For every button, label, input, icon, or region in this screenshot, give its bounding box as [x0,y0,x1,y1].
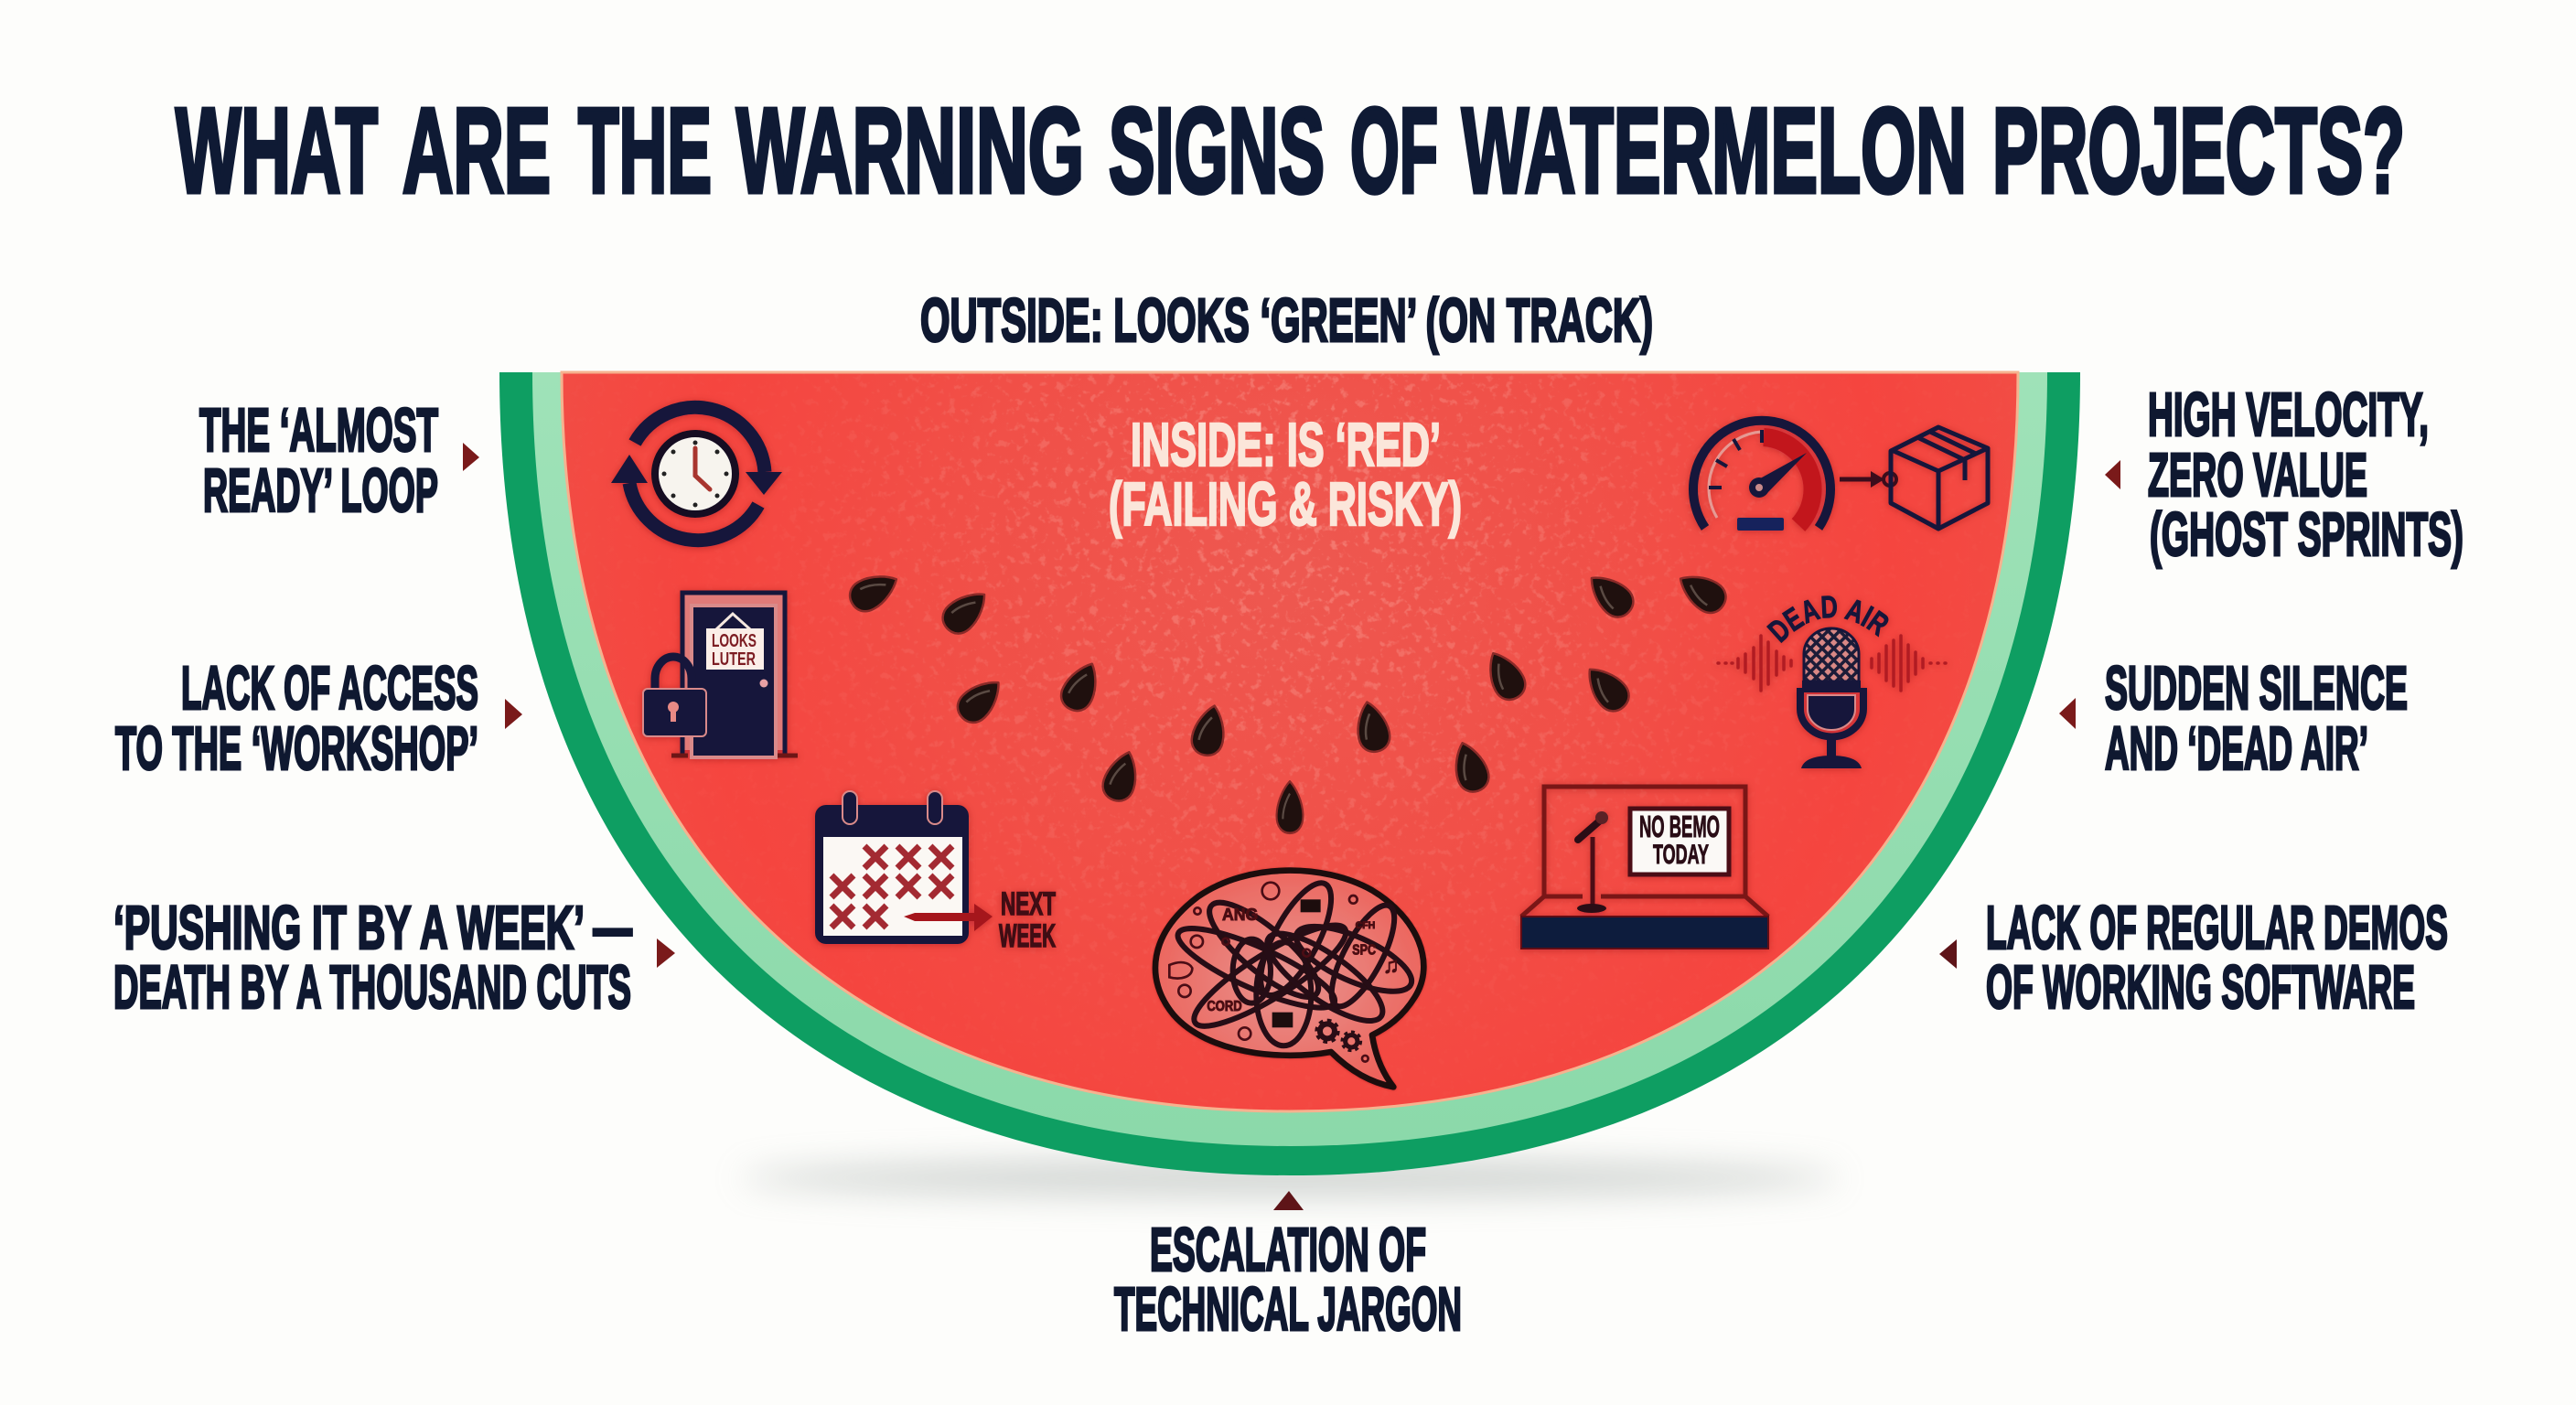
label: lack of access [115,654,478,783]
title: THE [578,83,712,218]
arrow: pushing [657,938,675,968]
inside line 1: INSIDE: IS ‘RED’ [1131,411,1441,479]
icon: jargon speech bubble: ANG [1222,905,1258,924]
flesh texture [816,373,1760,962]
sound waves [1718,636,1946,691]
icon: jargon speech bubble: CFH [1356,920,1375,931]
title: ARE [402,83,551,218]
line 2: ZERO VALUE [2148,441,2367,509]
title: WARNING [736,83,1084,218]
icon: locked door [643,593,798,757]
melon ground shadow [741,1160,1839,1196]
title: WATERMELON [1462,83,1967,218]
icon: empty stage, no demo today [1521,787,1768,949]
icon: locked door: LUTER [712,649,756,670]
icon: jargon speech bubble: CORD [1207,999,1242,1014]
icon: jargon speech bubble: ♫ [1383,953,1400,978]
icon: clock loop [611,407,782,541]
title: OF [1350,83,1438,218]
arrow: jargon [1273,1191,1304,1210]
label: pushing it by a week [113,894,632,1022]
title: WHAT [176,83,378,218]
label: escalation of technical jargon [1114,1216,1462,1344]
watermelon slice [499,366,2080,1175]
icon: calendar with next week [815,791,1056,954]
line 2: TECHNICAL JARGON [1114,1275,1462,1344]
label: the almost ready loop [199,396,438,525]
line 1: ESCALATION OF [1150,1216,1426,1284]
outside heading: OUTSIDE: LOOKS ‘GREEN’ (ON TRACK) [920,286,1653,355]
arrow: velocity [2105,460,2120,489]
line 1: THE ‘ALMOST [199,396,438,465]
seeds [844,565,1732,833]
icon: dead air microphone [1716,594,1948,772]
gears [1316,1020,1361,1051]
inside heading [1109,411,1462,539]
next week label: NEXT [1001,886,1056,922]
icon: empty stage, no demo today: TODAY [1653,840,1709,870]
arrow: silence [2059,698,2076,729]
line 2: AND ‘DEAD AIR’ [2105,714,2368,783]
icon: jargon speech bubble: SPC [1352,942,1376,958]
next week label: WEEK [999,918,1056,954]
icon: empty stage, no demo today: NO BEMO [1639,810,1720,843]
label: sudden silence [2105,654,2408,783]
line 2: READY’ LOOP [203,456,438,525]
rind: light green [532,372,2047,1146]
label: high velocity [2148,381,2463,569]
line 2: DEATH BY A THOUSAND CUTS [113,953,631,1022]
icon: locked door: LOOKS [712,631,757,651]
arrow: workshop [505,699,522,729]
small symbols [1169,883,1368,1062]
arrow: almost ready [463,443,479,471]
line 2: TO THE ‘WORKSHOP’ [115,714,478,783]
arrow: demos [1939,939,1957,969]
line 1: LACK OF ACCESS [181,654,478,723]
flesh: red [562,372,2018,1111]
rind: dark green [499,372,2080,1175]
label: lack of regular demos [1986,894,2448,1022]
line 1: ‘PUSHING IT BY A WEEK’ — [113,894,632,962]
title [176,83,2405,218]
title: SIGNS [1109,83,1325,218]
icon: jargon speech bubble [1155,871,1423,1087]
next week label [999,886,1056,954]
icon: speed gauge and box [1693,421,1988,531]
dead air curved label: DEAD AIR [1766,594,1891,645]
inside line 2: (FAILING & RISKY) [1109,470,1462,539]
